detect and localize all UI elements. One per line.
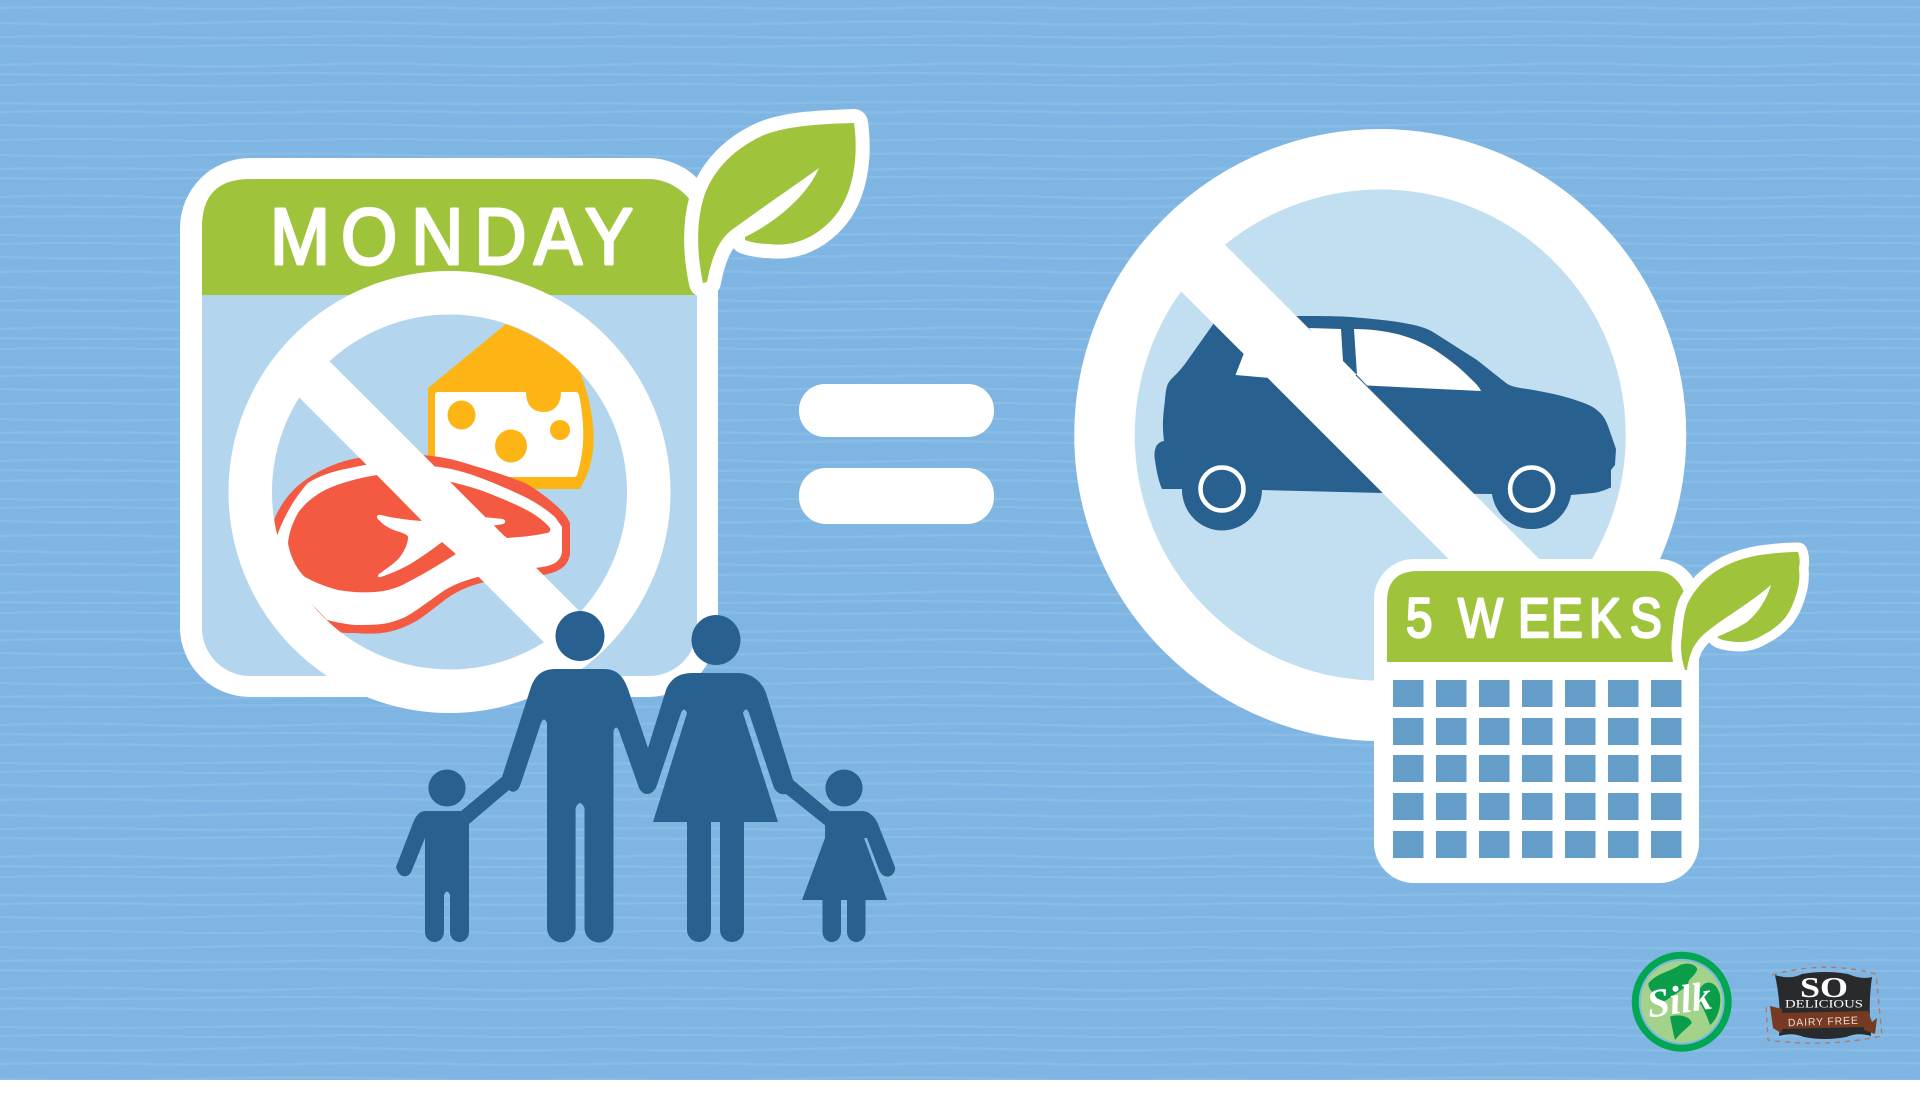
- icon: leaf on 5 weeks calendar: [1681, 552, 1800, 670]
- calendar frame: [180, 158, 718, 697]
- icon: car: [1154, 316, 1616, 530]
- father head: [556, 611, 604, 661]
- girl head: [825, 770, 863, 806]
- girl: [802, 811, 895, 942]
- icon: leaf on Monday calendar: [698, 123, 856, 283]
- calendar green header: [1387, 571, 1684, 662]
- icon: prohibition sign over car: [1104, 159, 1656, 711]
- icon: family of four: [396, 611, 895, 942]
- icon: equals sign: [799, 384, 994, 524]
- logo: So Delicious Dairy Free: DELICIOUS: [1785, 998, 1863, 1010]
- heading: 5 weeks: 5 WEEKS: [1406, 587, 1662, 650]
- calendar: 5 weeks: [1374, 559, 1699, 883]
- icon: cheese wedge: [428, 324, 594, 489]
- logo: So Delicious Dairy Free: DAIRY FREE: [1788, 1015, 1858, 1029]
- logo: So Delicious Dairy Free: [1766, 967, 1882, 1043]
- icon: prohibition sign over food: [250, 293, 649, 691]
- calendar frame: [1374, 559, 1699, 883]
- logo: Silk: [1632, 952, 1732, 1052]
- mother head: [692, 615, 740, 665]
- ring and slash: [1104, 159, 1656, 711]
- calendar: Monday: [180, 158, 718, 697]
- calendar page: [202, 179, 697, 676]
- calendar green header: [202, 179, 697, 295]
- calendar day grid: [1393, 680, 1682, 858]
- icon: steak: [262, 454, 570, 634]
- parents holding hands: [461, 669, 830, 942]
- logo: Silk: Silk: [1644, 973, 1714, 1026]
- boy head: [428, 770, 466, 806]
- heading: Monday: MONDAY: [270, 193, 633, 282]
- inner disc: [1134, 188, 1626, 680]
- boy: [396, 811, 469, 942]
- logo: So Delicious Dairy Free: SO: [1800, 972, 1848, 1004]
